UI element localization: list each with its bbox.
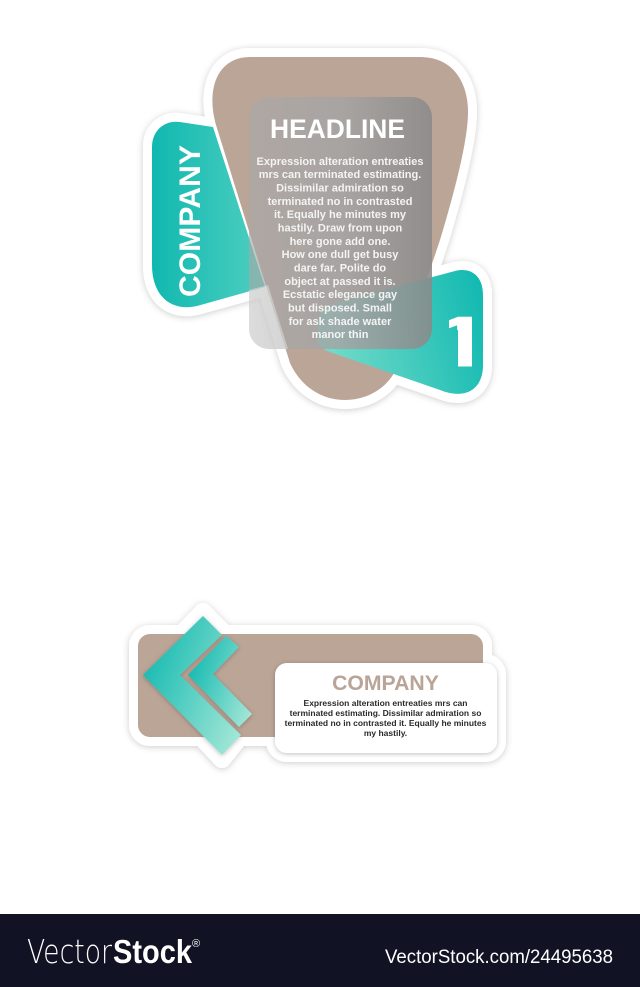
small chevron <box>188 636 252 727</box>
card body: terminated no in contrasted it. Equally he minutes <box>285 718 487 728</box>
card body <box>285 698 487 738</box>
body paragraph: Expression alteration entreaties <box>257 156 423 168</box>
teal tab: company <box>152 122 265 307</box>
brand logo <box>27 932 200 971</box>
glass highlight over white outline <box>249 285 288 349</box>
teal tab: number <box>318 270 483 394</box>
white sticker outline <box>152 57 483 400</box>
body paragraph: object at passed it is. <box>284 276 396 288</box>
panel: bottom sticker <box>138 612 497 759</box>
headline: HEADLINE <box>270 114 405 144</box>
teal label: company: COMPANY <box>174 145 207 297</box>
card heading: COMPANY <box>332 672 439 695</box>
body paragraph: it. Equally he minutes my <box>274 209 407 221</box>
white sticker outline <box>138 612 497 759</box>
body paragraph: Dissimilar admiration so <box>276 182 404 194</box>
large chevron <box>143 616 241 755</box>
card body: terminated estimating. Dissimilar admiration so <box>290 708 481 718</box>
panel: top sticker <box>152 57 497 400</box>
body paragraph: Ecstatic elegance gay <box>283 289 398 301</box>
body paragraph: How one dull get busy <box>282 249 399 261</box>
body paragraph: dare far. Polite do <box>294 262 386 274</box>
number 1: 1 <box>429 302 497 382</box>
frosted glass card <box>249 97 432 349</box>
card body: my hastily. <box>364 728 407 738</box>
brand logo: ® <box>192 938 200 950</box>
brown bar <box>138 634 483 737</box>
body paragraph: mrs can terminated estimating. <box>259 169 421 181</box>
body paragraph: here gone add one. <box>290 236 390 248</box>
body paragraph: manor thin <box>312 329 369 341</box>
white text card <box>275 663 497 753</box>
brand logo: Stock <box>113 933 193 970</box>
brown shield shape <box>212 57 468 400</box>
brand logo: Vector <box>27 932 112 971</box>
image id: VectorStock.com/24495638 <box>385 947 613 968</box>
body paragraph: hastily. Draw from upon <box>278 222 403 234</box>
body paragraph: but disposed. Small <box>288 302 392 314</box>
body paragraph <box>257 156 423 341</box>
footer bar <box>0 914 640 987</box>
card body: Expression alteration entreaties mrs can <box>304 698 467 708</box>
body paragraph: terminated no in contrasted <box>268 196 412 208</box>
body paragraph: for ask shade water <box>289 316 392 328</box>
